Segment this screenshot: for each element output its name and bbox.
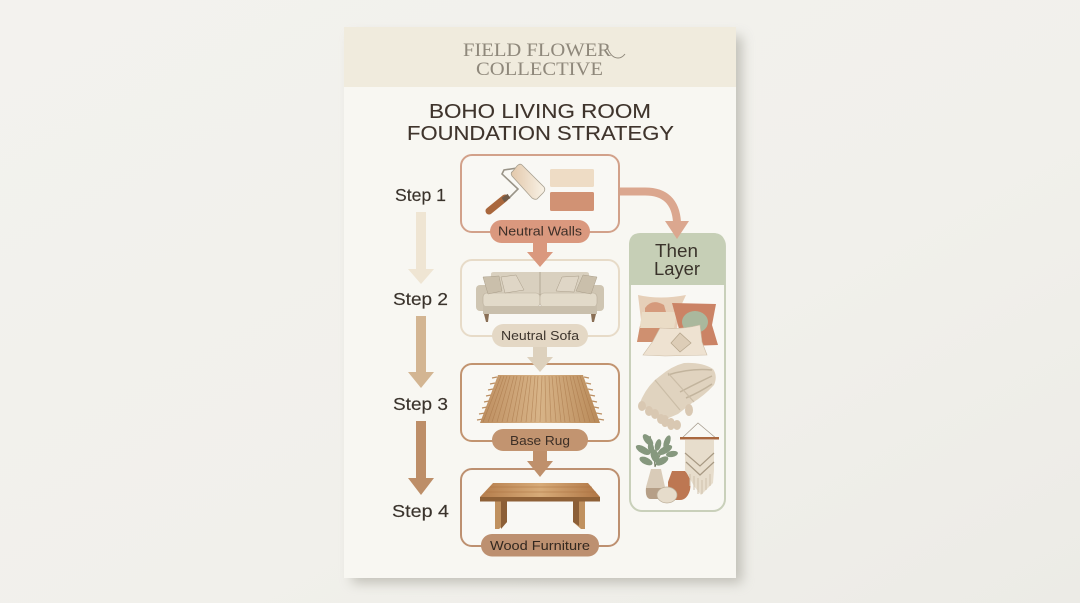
- panel: then layer: [629, 233, 725, 511]
- curved arrow to then layer: [620, 192, 689, 239]
- arrow: sofa to rug: [527, 347, 553, 372]
- label: neutral sofa: [492, 324, 588, 347]
- arrow: step 3 to 4: [408, 421, 434, 495]
- arrow: rug to furniture: [527, 451, 553, 477]
- arrow: walls to sofa: [527, 243, 553, 267]
- arrow: step 1 to 2: [408, 212, 434, 284]
- icon: throw blanket: [638, 363, 716, 430]
- label: base rug: [492, 429, 588, 451]
- brand name: COLLECTIVE: [476, 59, 603, 80]
- poster shadow: [352, 36, 742, 583]
- icon: paint roller: [489, 164, 545, 211]
- title: [407, 100, 674, 145]
- swatch: terracotta: [550, 192, 594, 211]
- icon: sofa: [476, 272, 604, 322]
- label: base rug: Base Rug: [510, 434, 570, 448]
- title: FOUNDATION STRATEGY: [407, 122, 674, 145]
- brand name: FIELD FLOWER: [463, 40, 611, 61]
- brand name: [463, 40, 625, 80]
- swatch: cream: [550, 169, 594, 187]
- card: neutral sofa: [461, 260, 619, 347]
- step labels: [392, 185, 449, 521]
- label: neutral walls: Neutral Walls: [498, 224, 582, 238]
- card: neutral walls: [461, 155, 619, 243]
- label: wood furniture: Wood Furniture: [490, 539, 590, 553]
- card: base rug: [461, 364, 619, 451]
- title: BOHO LIVING ROOM: [429, 100, 651, 123]
- panel heading: Layer: [654, 258, 700, 279]
- icon: pillows: [637, 295, 718, 356]
- card: wood furniture: [461, 469, 619, 556]
- arrow: step 2 to 3: [408, 316, 434, 388]
- label: wood furniture: [481, 534, 599, 556]
- panel heading: Then: [655, 240, 698, 261]
- label: neutral sofa: Neutral Sofa: [501, 329, 579, 343]
- step labels: Step 4: [392, 501, 449, 521]
- icon: rug: [477, 375, 604, 423]
- icon: macrame wall hanging: [680, 423, 719, 495]
- header band: [344, 27, 736, 87]
- step labels: Step 1: [395, 185, 446, 205]
- label: neutral walls: [490, 220, 590, 243]
- icon: wood table: [480, 483, 600, 529]
- step labels: Step 2: [393, 289, 448, 309]
- panel heading: [629, 233, 725, 285]
- icon: plant and vases: [634, 432, 690, 503]
- step labels: Step 3: [393, 394, 448, 414]
- poster: [344, 27, 736, 578]
